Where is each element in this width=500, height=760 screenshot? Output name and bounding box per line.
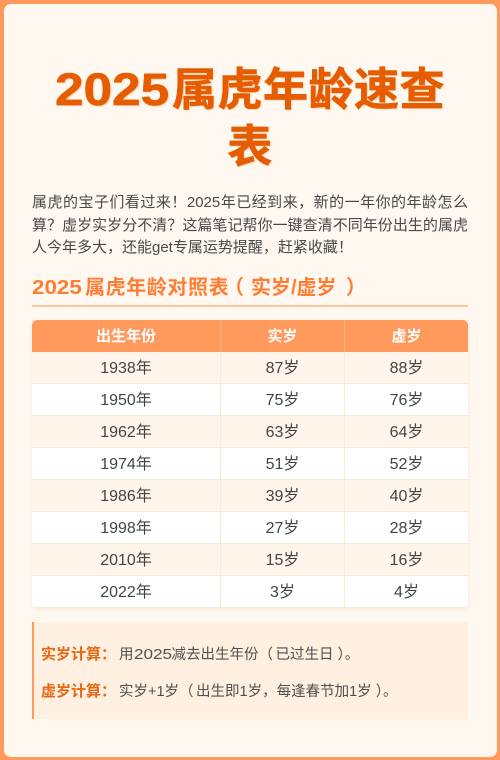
calculation note panel	[32, 622, 468, 719]
table header: 实岁	[267, 328, 298, 345]
real age rule: 2025	[134, 647, 172, 663]
section heading: 属虎年龄对照表	[85, 277, 229, 299]
row 1962: 63岁	[266, 424, 299, 441]
row 2022: 4岁	[394, 584, 419, 601]
row 1974: 1974年	[100, 456, 152, 473]
row 1986: 1986年	[100, 488, 152, 505]
row 1986: 39岁	[266, 488, 299, 505]
row 2010: 16岁	[390, 552, 423, 569]
nominal age rule: 实岁+1岁（出生即1岁，每逢春节加1岁 ）。	[119, 684, 397, 700]
section heading: （	[224, 277, 244, 299]
title: 2025	[55, 64, 169, 115]
row 1950: 76岁	[390, 392, 423, 409]
row 1950: 1950年	[100, 392, 152, 409]
section heading: 实岁/虚岁	[251, 277, 337, 299]
real age rule: 用 减去出生年份（已过生日 ）。	[119, 647, 359, 663]
row 2022	[32, 576, 468, 608]
title	[55, 64, 445, 172]
row 1986: 40岁	[390, 488, 423, 505]
row 1962: 1962年	[100, 424, 152, 441]
row 1974: 51岁	[266, 456, 299, 473]
row 2022: 3岁	[270, 584, 295, 601]
row 1986	[32, 480, 468, 512]
row 1998: 28岁	[390, 520, 423, 537]
row 1950	[32, 384, 468, 416]
row 1974	[32, 448, 468, 480]
table header: 出生年份	[96, 328, 156, 345]
table header	[32, 320, 468, 352]
row 1950: 75岁	[266, 392, 299, 409]
row 1938	[32, 352, 468, 384]
row 1998: 27岁	[266, 520, 299, 537]
row 2010: 15岁	[266, 552, 299, 569]
row 2010	[32, 544, 468, 576]
row 2022: 2022年	[100, 584, 152, 601]
intro text: 属虎的宝子们看过来！2025年已经到来，新的一年你的年龄怎么	[32, 194, 468, 211]
row 1998: 1998年	[100, 520, 152, 537]
section heading: ）	[346, 277, 366, 299]
row 2010: 2010年	[100, 552, 152, 569]
row 1962: 64岁	[390, 424, 423, 441]
row 1962	[32, 416, 468, 448]
intro text: 人今年多大，还能get专属运势提醒，赶紧收藏！	[32, 239, 353, 256]
row 1974: 52岁	[390, 456, 423, 473]
row 1938: 1938年	[100, 360, 152, 377]
section heading: 2025	[32, 277, 82, 299]
intro text: 算？虚岁实岁分不清？这篇笔记帮你一键查清不同年份出生的属虎	[32, 217, 468, 234]
table header: 虚岁	[391, 328, 422, 345]
row 1938: 87岁	[266, 360, 299, 377]
intro text	[32, 194, 468, 256]
real age rule: 实岁计算：	[41, 646, 116, 663]
title: 表	[227, 121, 273, 172]
age table	[32, 320, 468, 608]
row 1938: 88岁	[390, 360, 423, 377]
row 1998	[32, 512, 468, 544]
title: 属虎年龄速查	[172, 64, 445, 115]
nominal age rule: 虚岁计算：	[41, 683, 116, 700]
section heading	[32, 276, 366, 299]
